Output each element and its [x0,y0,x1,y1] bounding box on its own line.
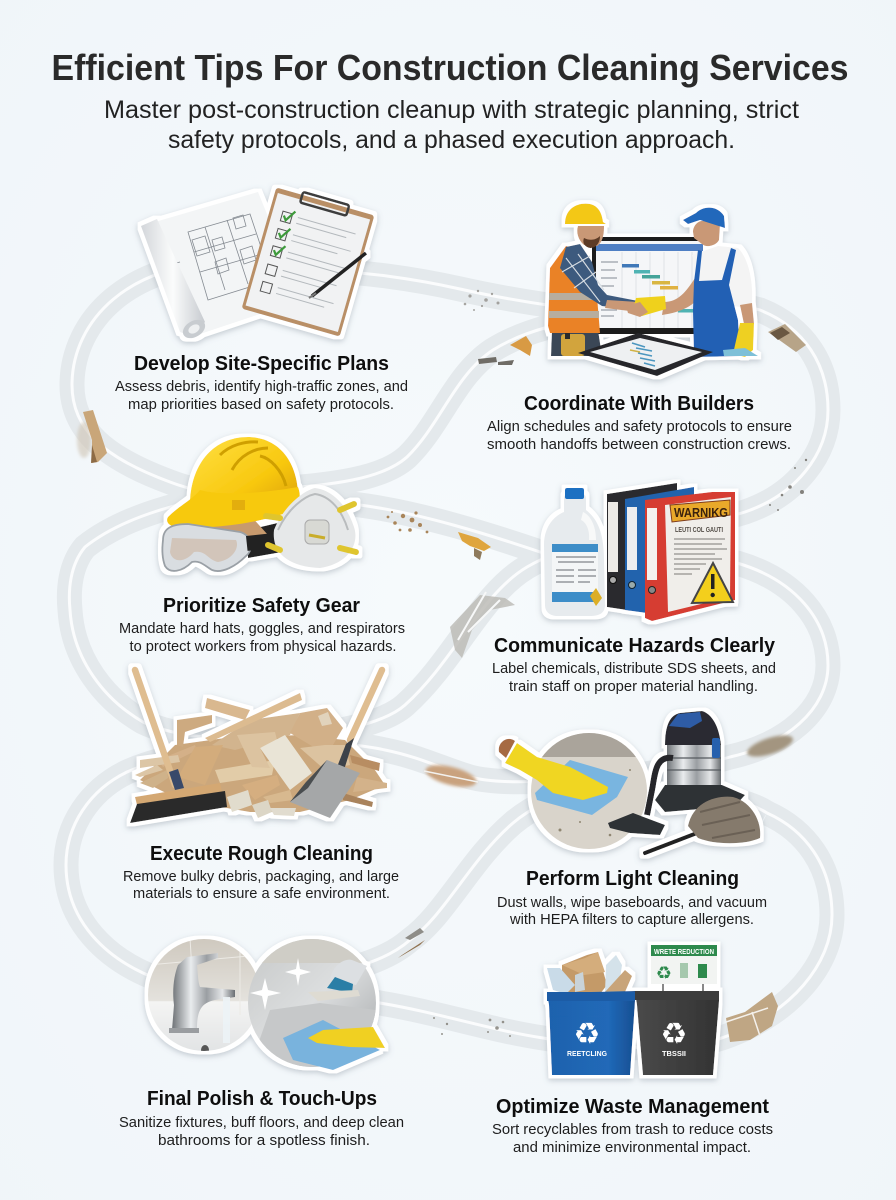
description [497,895,767,928]
heading: Communicate Hazards Clearly [494,635,776,657]
panel: develop site-specific plans [115,184,408,413]
subtitle: Master post-construction cleanup with strategic planning, strict [104,96,799,124]
heading: Optimize Waste Management [496,1096,769,1118]
icon: recycling and trash bins: ♻ [656,963,672,984]
description: map priorities based on safety protocols. [128,397,394,413]
icon: chemical jug and hazard binders: LEUTI COL GAUTI [675,527,723,534]
panel: prioritize safety gear [119,437,405,655]
panel: final polish and touch-ups [119,938,404,1149]
icon: blueprint and clipboard [141,184,375,342]
heading: Perform Light Cleaning [526,868,739,890]
icon: polished faucet and floor [148,938,385,1070]
description [119,1115,404,1149]
panel: optimize waste management [492,945,773,1156]
description [115,379,408,413]
subtitle: safety protocols, and a phased execution approach. [168,126,735,154]
description: bathrooms for a spotless finish. [158,1133,370,1149]
icon: recycling and trash bins: REETCLING [567,1049,607,1058]
subtitle [104,96,799,154]
description: smooth handoffs between construction crews. [487,437,791,453]
icon: glove, vacuum and duster [499,711,760,853]
icon: recycling and trash bins: WRETE REDUCTION [654,949,714,956]
road path network [66,262,832,1048]
panel: execute rough cleaning [123,670,399,902]
icon: chemical jug and hazard binders: WARNIKG [674,506,728,520]
description: Remove bulky debris, packaging, and large [123,869,399,885]
panel: perform light cleaning [497,711,767,928]
description [492,661,776,695]
description: Assess debris, identify high-traffic zones, and [115,379,408,395]
title: Efficient Tips For Construction Cleaning Services [52,47,848,88]
icon: recycling and trash bins: ♻ [661,1017,687,1052]
icon: debris pile, broom and shovel [130,670,387,823]
description: materials to ensure a safe environment. [133,886,390,902]
description: Dust walls, wipe baseboards, and vacuum [497,895,767,911]
description [123,869,399,902]
panel: communicate hazards clearly [492,483,776,695]
description: train staff on proper material handling. [509,679,758,695]
description: to protect workers from physical hazards. [130,639,396,655]
description: Label chemicals, distribute SDS sheets, and [492,661,776,677]
description [119,621,405,655]
heading: Coordinate With Builders [524,393,754,415]
heading: Develop Site-Specific Plans [134,353,389,375]
heading: Final Polish & Touch-Ups [147,1088,377,1110]
description: Sanitize fixtures, buff floors, and deep clean [119,1115,404,1131]
heading: Prioritize Safety Gear [163,595,360,617]
description: and minimize environmental impact. [513,1140,751,1156]
description: Mandate hard hats, goggles, and respirators [119,621,405,637]
icon: hard hat, goggles and respirator [162,437,356,571]
panel: coordinate with builders [487,204,792,453]
icon: builders handshake with schedule [548,204,758,376]
description: Align schedules and safety protocols to ensure [487,419,792,435]
icon: recycling and trash bins: TBSSII [662,1049,686,1058]
icon: chemical jug and hazard binders [544,483,735,621]
description: with HEPA filters to capture allergens. [509,912,754,928]
icon: recycling and trash bins: ♻ [574,1017,600,1052]
debris marks on the road [77,290,807,1042]
icon: recycling and trash bins [547,945,719,1075]
description [492,1122,773,1156]
description [487,419,792,453]
heading: Execute Rough Cleaning [150,843,373,865]
description: Sort recyclables from trash to reduce costs [492,1122,773,1138]
